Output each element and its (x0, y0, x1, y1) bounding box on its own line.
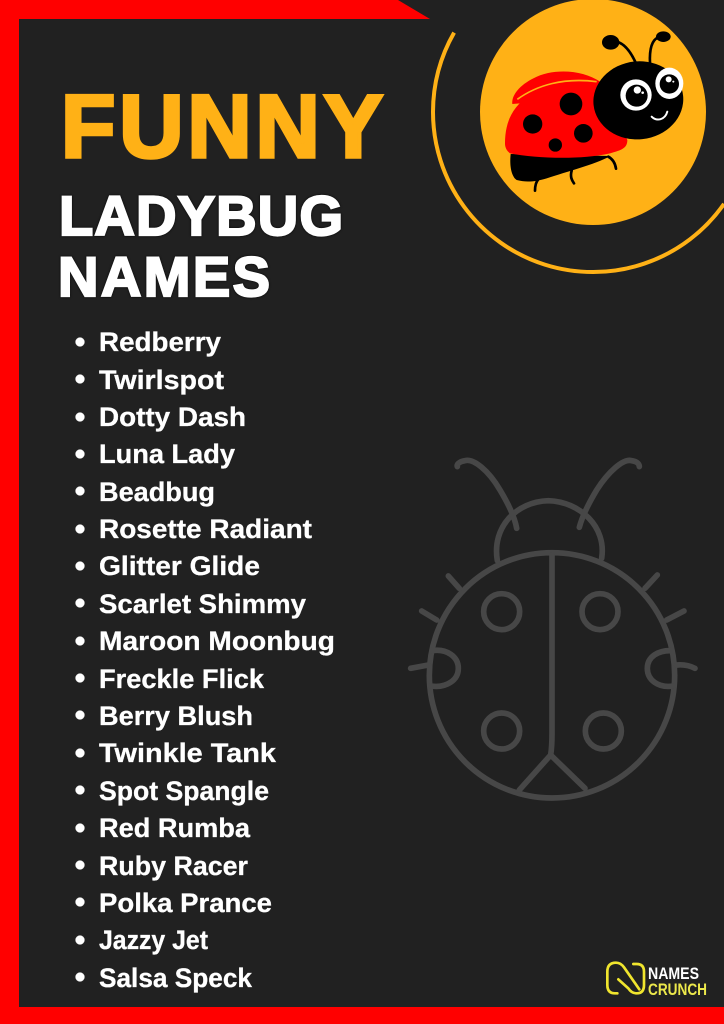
bulleted list of names: Spot Spangle (99, 776, 269, 806)
bulleted list of names: Berry Blush (99, 701, 253, 731)
logo mark: N monogram (607, 963, 644, 993)
bulleted list of names: Twinkle Tank (99, 738, 277, 768)
yellow ring arc (433, 33, 724, 272)
heading: LADYBUG NAMES: LADYBUG (59, 184, 343, 247)
bulleted list of names: Maroon Moonbug (99, 626, 335, 656)
heading: LADYBUG NAMES: NAMES (58, 245, 270, 308)
icon: cartoon ladybug (505, 31, 687, 191)
bulleted list of names: Beadbug (99, 477, 215, 507)
heading: LADYBUG NAMES (58, 184, 343, 308)
bulleted list of names: Luna Lady (99, 439, 235, 469)
yellow circle (480, 0, 706, 225)
bulleted list of names (76, 327, 335, 993)
bulleted list of names: Redberry (99, 327, 221, 357)
bulleted list of names: Rosette Radiant (99, 514, 312, 544)
logo wordmark (648, 964, 707, 999)
bulleted list of names: Twirlspot (99, 365, 224, 395)
icon: ghost ladybug outline (411, 460, 695, 798)
bulleted list of names: Jazzy Jet (99, 925, 208, 955)
title: FUNNY: FUNNY (61, 76, 383, 176)
bulleted list of names: Salsa Speck (99, 963, 253, 993)
logo: Names Crunch (607, 963, 707, 999)
bulleted list of names: Red Rumba (99, 813, 251, 843)
logo wordmark: CRUNCH (648, 980, 707, 999)
bulleted list of names: Ruby Racer (99, 851, 248, 881)
bulleted list of names: Scarlet Shimmy (99, 589, 306, 619)
bulleted list of names: Dotty Dash (99, 402, 246, 432)
bulleted list of names: Polka Prance (99, 888, 272, 918)
logo wordmark: NAMES (648, 964, 699, 983)
bulleted list of names: Glitter Glide (99, 551, 260, 581)
bulleted list of names: Freckle Flick (99, 664, 265, 694)
